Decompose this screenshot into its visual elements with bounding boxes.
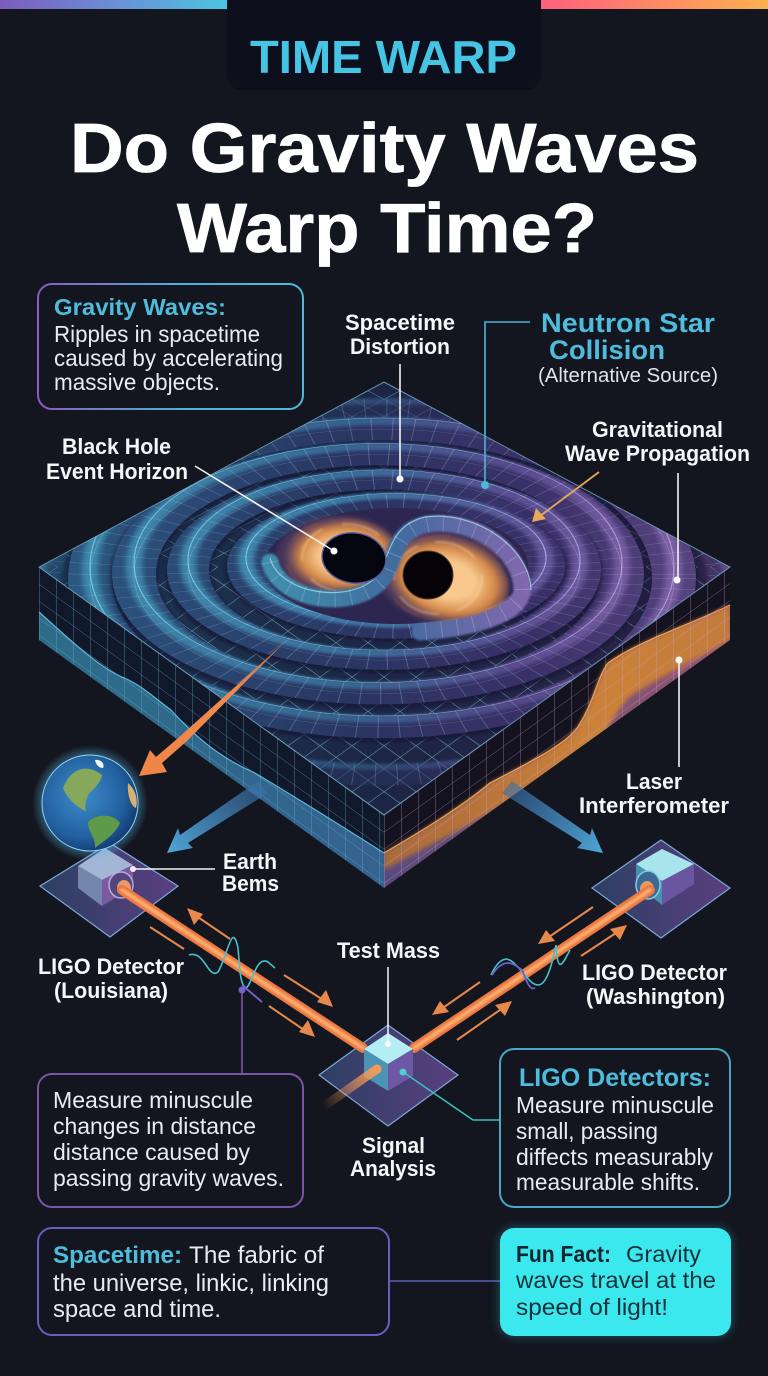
label: laser interferometer: Laser (626, 769, 682, 794)
connector: test mass (385, 967, 391, 1047)
main title: Do Gravity Waves (70, 109, 699, 187)
label: test mass: Test Mass (337, 938, 440, 963)
connector: laser interferometer (676, 656, 682, 767)
label: laser interferometer: Interferometer (579, 793, 729, 818)
connector: neutron star (481, 322, 530, 489)
top accent bar left (0, 0, 228, 9)
body: ligo detectors: small, passing (516, 1118, 658, 1144)
label: signal analysis (350, 1133, 436, 1181)
ring 5 (39, 401, 729, 775)
connector: ligo detectors box (400, 1068, 500, 1120)
panel: spacetime (38, 1228, 389, 1335)
s-curve tube (270, 516, 531, 632)
body: gravity waves (54, 321, 283, 395)
arrow: orange to earth (139, 643, 284, 776)
connector: spacetime distortion (396, 364, 404, 482)
ring 1 (246, 494, 546, 632)
gravity squiggle right purple (492, 963, 535, 988)
body: gravity waves: Ripples in spacetime (54, 321, 260, 347)
connector: measure box (238, 986, 246, 1074)
panel: fun fact: Fun Fact: (516, 1241, 611, 1267)
label: ligo detector louisiana: LIGO Detector (38, 954, 184, 979)
body: ligo detectors: measurable shifts. (516, 1169, 700, 1195)
short beam (323, 1069, 377, 1107)
label: black hole event horizon: Black Hole (62, 434, 171, 459)
laser beams (122, 890, 650, 1048)
connector: earth bems (130, 866, 215, 872)
label: black hole event horizon (46, 434, 188, 484)
label: neutron star collision: Neutron Star (541, 308, 716, 338)
platform (319, 1025, 458, 1126)
label: signal analysis: Analysis (350, 1156, 436, 1181)
label: ligo detector washington: (Washington) (586, 984, 725, 1009)
slab left face (39, 567, 384, 888)
platform (40, 843, 178, 937)
label: signal analysis: Signal (362, 1133, 425, 1158)
right detector (592, 840, 730, 938)
arrow: gravitational wave propagation (532, 472, 599, 522)
gravity squiggle right (491, 945, 570, 985)
label: spacetime distortion: Distortion (350, 334, 450, 359)
black hole one (319, 529, 389, 587)
cube (78, 848, 133, 906)
panel: measure minuscule: changes in distance (53, 1113, 256, 1139)
surface grid front (39, 567, 730, 815)
panel: spacetime: the universe, linkic, linking (53, 1270, 329, 1297)
arrow: blue to right detector (502, 781, 603, 853)
label: ligo detector louisiana (38, 954, 184, 1003)
connector: spacetime to fun fact (389, 1280, 500, 1282)
heading: ligo detectors: LIGO Detectors: (519, 1064, 711, 1092)
label: earth bems: Bems (222, 871, 279, 896)
panel: fun fact: waves travel at the (515, 1267, 716, 1293)
header tab (227, 0, 541, 90)
label: spacetime distortion (345, 310, 455, 359)
panel: measure minuscule: Measure minuscule (53, 1087, 253, 1113)
earth (32, 745, 148, 861)
small motion arrows (150, 907, 627, 1040)
body: ligo detectors: Measure minuscule (516, 1092, 714, 1118)
surface edges (39, 382, 730, 815)
label: gravitational wave propagation (565, 417, 750, 466)
ring 3 (134, 443, 622, 697)
cube (364, 1033, 413, 1091)
panel: spacetime: space and time. (53, 1296, 221, 1323)
slab top surface (39, 382, 730, 815)
label: ligo detector washington (582, 960, 727, 1009)
cube (636, 849, 694, 905)
panel: measure minuscule: passing gravity waves. (53, 1165, 284, 1191)
label: neutron star collision: Collision (549, 335, 665, 365)
spacetime slab (39, 382, 730, 888)
panel: fun fact: Gravity (626, 1241, 702, 1267)
panel: fun fact: speed of light! (516, 1294, 668, 1320)
panel: ligo detectors (500, 1049, 730, 1207)
label: earth bems: Earth (223, 849, 277, 874)
panel: measure minuscule (38, 1074, 303, 1207)
platform (592, 840, 730, 938)
panel: spacetime: The fabric of (189, 1242, 324, 1269)
panel: fun fact (500, 1228, 731, 1336)
body: gravity waves: caused by accelerating (54, 345, 283, 371)
heading: gravity waves: Gravity Waves: (54, 294, 226, 320)
ring 4 (90, 418, 674, 730)
connector: black hole label (195, 466, 338, 554)
label: neutron star collision (538, 308, 718, 387)
label: spacetime distortion: Spacetime (345, 310, 455, 335)
surface grid back (39, 382, 730, 567)
main title: Warp Time? (177, 189, 597, 267)
panel: gravity waves (38, 284, 303, 409)
body: ligo detectors (516, 1092, 714, 1195)
body: ligo detectors: diffects measurably (516, 1144, 713, 1170)
top accent bar right (541, 0, 768, 9)
ripple rings (39, 401, 729, 775)
accretion discs and black holes (264, 508, 531, 639)
label: gravitational wave propagation: Gravitational (592, 417, 723, 442)
body: gravity waves: massive objects. (54, 369, 220, 395)
slab right face (384, 567, 730, 888)
gravity squiggle left (189, 938, 275, 988)
arrow: blue to left detector (167, 781, 268, 853)
gravity squiggle left purple (242, 985, 262, 1002)
label: earth bems (222, 849, 279, 896)
connector: propagation point (674, 473, 680, 584)
label: ligo detector washington: LIGO Detector (582, 960, 727, 985)
black hole two (403, 551, 453, 599)
label: black hole event horizon: Event Horizon (46, 459, 188, 484)
eyebrow title: TIME WARP (250, 31, 517, 83)
label: ligo detector louisiana: (Louisiana) (54, 978, 168, 1003)
label: neutron star collision: (Alternative Source) (538, 365, 718, 387)
center test mass (122, 890, 650, 1126)
left detector (40, 843, 178, 937)
panel: spacetime: Spacetime: (53, 1242, 182, 1269)
panel: measure minuscule: distance caused by (53, 1139, 250, 1165)
main title (70, 109, 699, 267)
label: laser interferometer (579, 769, 729, 818)
ring 2 (188, 470, 580, 663)
label: gravitational wave propagation: Wave Propagation (565, 441, 750, 466)
